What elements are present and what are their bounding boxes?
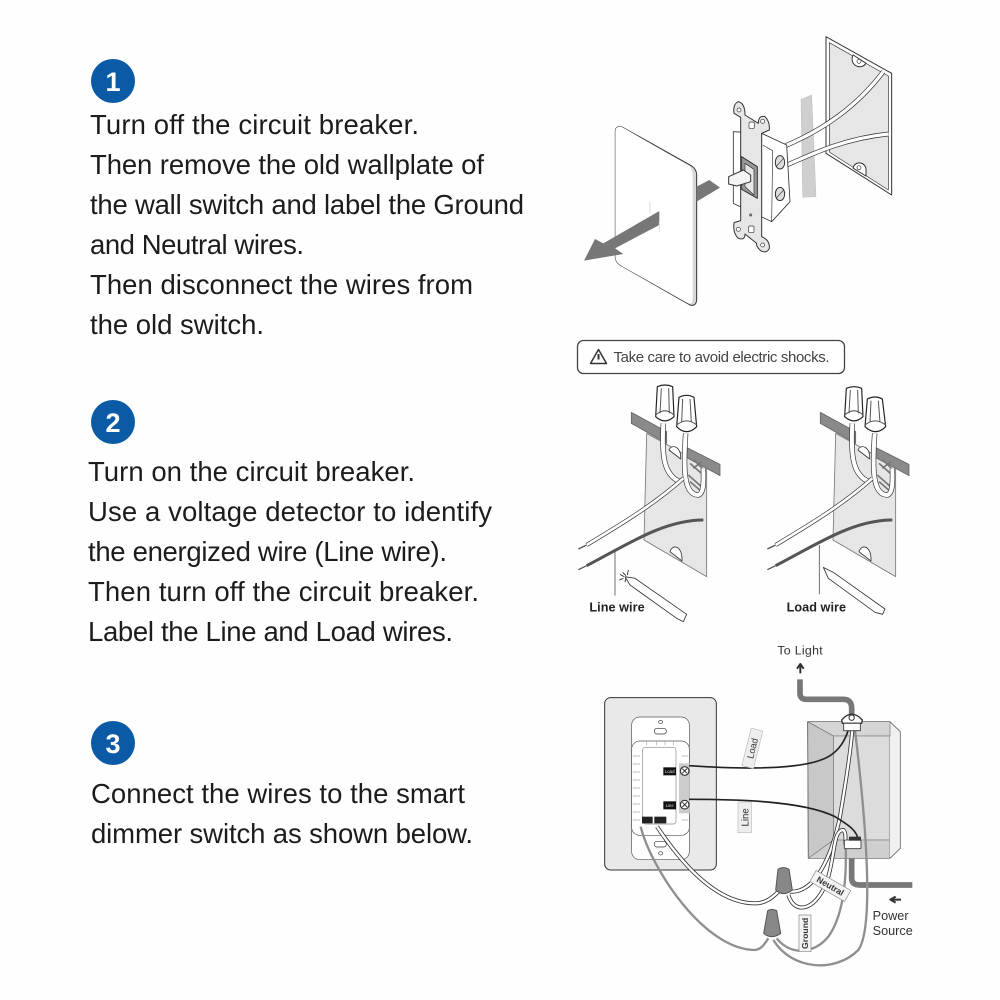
step 1 instructions [90,109,524,340]
conduit to light [800,679,852,717]
callout: electric shock warning [578,340,844,374]
wire tape [801,95,816,197]
step 3 number badge [91,721,135,765]
step 3 number badge: 3 [105,729,121,759]
wire nuts [845,387,886,432]
coiled wires [663,423,704,495]
step 1 number badge [91,59,135,103]
metal strap [734,102,769,252]
step 1 instructions: and Neutral wires. [90,229,304,260]
wire nut: ground [764,909,781,937]
wire nut: neutral [776,868,792,894]
callout: electric shock warning: Take care to avoid electric shocks. [614,349,830,366]
wire nuts [656,385,697,432]
step 1 instructions: the old switch. [90,309,264,340]
label tag: load [742,728,763,769]
step 2 instructions [88,456,492,647]
label: power source: Source [873,924,913,938]
step 3 instructions [91,778,473,849]
label: power source: Power [873,909,909,923]
step 2 instructions: Turn on the circuit breaker. [88,456,415,487]
wall box [833,433,896,577]
wire tape [631,412,720,476]
step 2 instructions: Label the Line and Load wires. [88,616,453,647]
step 3 instructions: Connect the wires to the smart [91,778,465,809]
terminal screws [680,767,689,775]
illustration: load wire test [767,387,909,615]
step 1 number badge: 1 [105,67,121,97]
top cable clamp [842,714,862,731]
illustration: removing the wallplate [584,37,892,305]
wall box [808,722,900,858]
load and line hot wires [689,730,858,840]
step 1 instructions: the wall switch and label the Ground [90,189,524,220]
step 1 instructions: Then remove the old wallplate of [90,149,484,180]
step 2 instructions: Then turn off the circuit breaker. [88,576,479,607]
step 2 number badge [91,400,135,444]
toggle [729,157,757,198]
arrow: power source [890,897,901,903]
wall box [826,37,892,195]
switch body [733,132,790,222]
step 3 instructions: dimmer switch as shown below. [91,818,473,849]
wire tape [820,412,909,476]
label tag: neutral: Neutral [815,874,846,898]
label: load wire: Load wire [787,601,846,615]
coiled wires [852,423,893,495]
label tag: line: Line [740,808,751,826]
black wire [767,520,892,570]
step 2 instructions: the energized wire (Line wire). [88,536,447,567]
step 1 instructions: Then disconnect the wires from [90,269,473,300]
arrow: pull off [584,180,720,261]
wallplate [615,127,697,305]
voltage detector [619,570,687,622]
ground wires [641,730,867,965]
dimmer switch [632,717,690,860]
arrow: to light [797,664,804,673]
wall plate [605,698,716,870]
label tag: ground: Ground [800,918,810,949]
illustration: wiring the smart dimmer [605,644,913,965]
step 1 instructions: Turn off the circuit breaker. [90,109,419,140]
wires [783,72,888,167]
white wire [578,478,683,549]
black wire [578,520,703,570]
illustration: line wire test [578,385,720,622]
bottom cable clamp [844,837,861,849]
terminal labels [663,767,676,775]
label tag: load: Load [745,737,760,760]
step 2 instructions: Use a voltage detector to identify [88,496,492,527]
label: line wire: Line wire [589,601,645,615]
voltage detector [823,567,885,614]
neutral wires [657,730,852,908]
label tag: neutral [810,871,851,901]
wall box [644,433,707,577]
step 2 number badge: 2 [105,408,121,438]
dimmer switch: Load [665,769,675,774]
label: to light: To Light [777,644,823,658]
white wire [767,478,872,549]
dimmer switch: Line [666,803,674,808]
label tag: line [738,802,751,833]
conduit from power source [852,857,912,885]
